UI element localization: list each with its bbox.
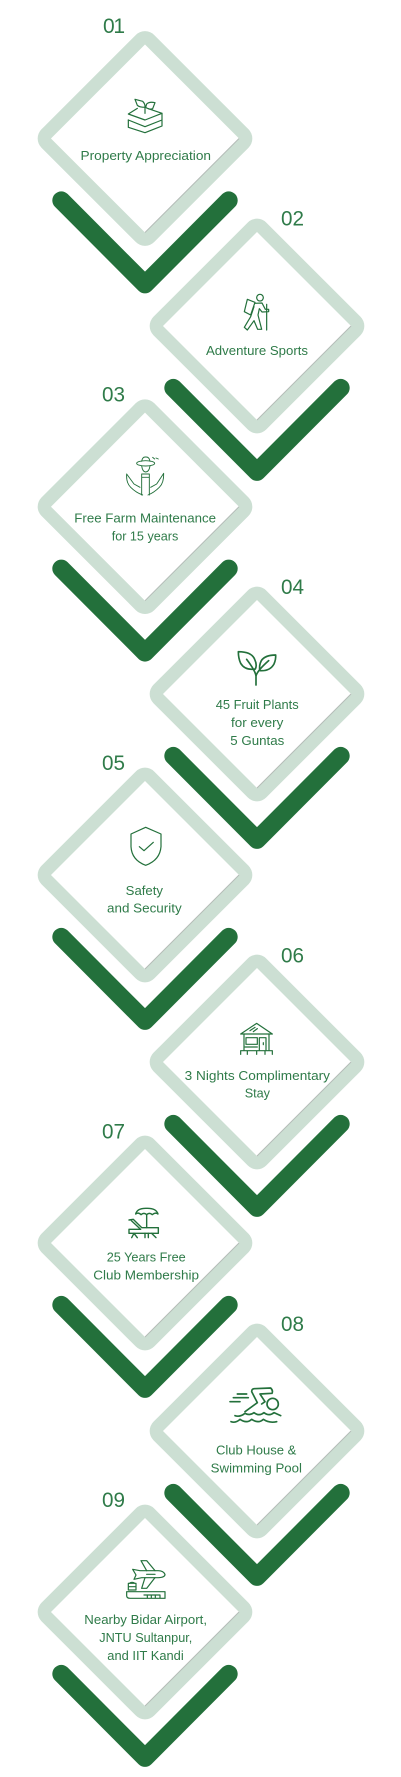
panel: 05 Safety and Security	[32, 752, 258, 1021]
diamond frame 08	[144, 1318, 370, 1544]
panel: 09 Nearby locations	[32, 1489, 258, 1758]
chevron 07	[61, 1305, 229, 1389]
chevron 08	[173, 1493, 341, 1577]
label 04 line 3: 5 Guntas	[230, 733, 285, 748]
number 07: 07	[102, 1121, 125, 1144]
label 03 line 2: for 15 years	[112, 529, 179, 544]
diamond frame 07	[32, 1130, 258, 1356]
label 05 line 1: Safety	[126, 883, 164, 898]
label 03 line 1: Free Farm Maintenance	[74, 511, 216, 526]
label 09 line 1: Nearby Bidar Airport,	[84, 1612, 207, 1627]
label 05 line 2: and Security	[107, 901, 182, 916]
panel: 01 Property Appreciation	[32, 15, 258, 284]
chevron 06	[173, 1124, 341, 1208]
icon: sprout on layers	[128, 99, 162, 133]
diamond frame 02	[144, 213, 370, 439]
diamond frame 09	[32, 1499, 258, 1725]
icon: cottage	[241, 1023, 272, 1054]
label 04 line 2: for every	[231, 715, 284, 730]
chevron 03	[61, 569, 229, 653]
panel: 03 Free Farm Maintenance	[32, 384, 258, 653]
label 04 line 1: 45 Fruit Plants	[216, 697, 299, 712]
icon: hiker	[244, 294, 269, 330]
number 05: 05	[102, 752, 125, 775]
label 06 line 1: 3 Nights Complimentary	[185, 1068, 331, 1083]
chevron 05	[61, 937, 229, 1021]
chevron 01	[61, 200, 229, 284]
label 06 line 2: Stay	[245, 1086, 270, 1101]
label 08 line 2: Swimming Pool	[211, 1460, 302, 1475]
icon: beach lounger and umbrella	[129, 1208, 158, 1238]
diamond frame 04	[144, 581, 370, 807]
panel: 04 Fruit Plants	[144, 576, 370, 840]
panel: 08 Club House and Swimming Pool	[144, 1313, 370, 1577]
icon: two-leaf plant	[238, 652, 276, 685]
panel: 07 Club Membership	[32, 1121, 258, 1389]
icon: swimmer	[230, 1388, 281, 1422]
number 02: 02	[281, 207, 304, 230]
number 09: 09	[102, 1489, 125, 1512]
label 08 line 1: Club House &	[216, 1442, 297, 1457]
chevron 09	[61, 1674, 229, 1758]
number 01: 01	[103, 15, 125, 38]
label 09 line 2: JNTU Sultanpur,	[99, 1630, 192, 1645]
diamond frame 03	[32, 394, 258, 619]
panel: 02 Adventure Sports	[144, 207, 370, 472]
label 07 line 2: Club Membership	[93, 1267, 199, 1282]
diamond frame 01	[32, 26, 258, 251]
diamond frame 06	[144, 949, 370, 1175]
icon: farmer with open hands	[127, 457, 164, 495]
number 06: 06	[281, 944, 304, 967]
chevron 02	[173, 388, 341, 472]
icon: shield with check	[131, 827, 161, 865]
number 08: 08	[281, 1313, 304, 1336]
chevron 04	[173, 756, 341, 840]
diamond frame 05	[32, 762, 258, 988]
label 07 line 1: 25 Years Free	[107, 1249, 186, 1264]
panel: 06 Complimentary Stay	[144, 944, 370, 1208]
label 09 line 3: and IIT Kandi	[107, 1648, 184, 1663]
number 04: 04	[281, 576, 304, 599]
icon: airplane and terminal	[127, 1561, 165, 1598]
label 02: Adventure Sports	[206, 343, 308, 358]
number 03: 03	[102, 384, 125, 407]
label 01: Property Appreciation	[80, 148, 211, 163]
